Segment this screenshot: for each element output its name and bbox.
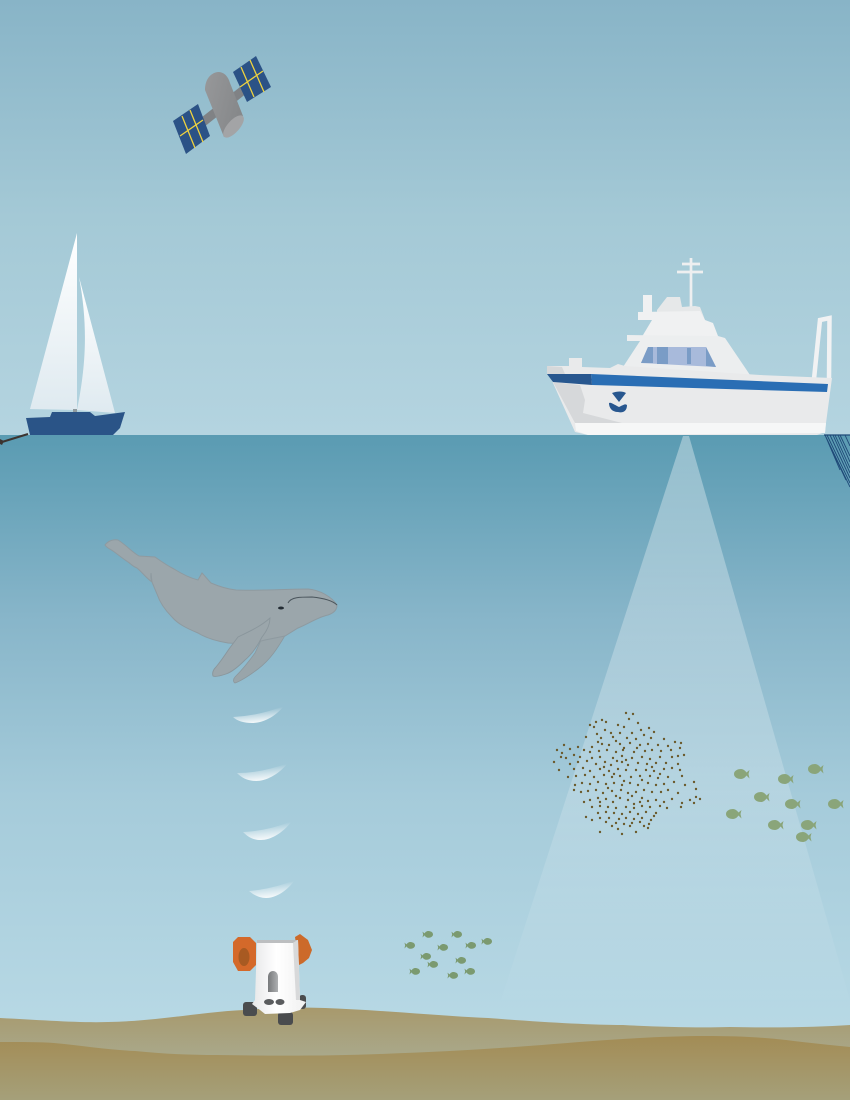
top deck dome xyxy=(657,297,705,320)
sailboat hull xyxy=(26,412,125,435)
small fish school xyxy=(404,931,492,979)
humpback whale xyxy=(105,540,337,683)
sonar beam from ship xyxy=(501,436,850,1000)
mainsail xyxy=(30,233,77,410)
instrument door xyxy=(268,971,278,992)
left float xyxy=(233,937,256,971)
cabin windows xyxy=(641,347,716,367)
sky background xyxy=(0,0,850,435)
pulse 1 xyxy=(233,706,284,723)
mast base xyxy=(73,409,77,413)
solar panel right xyxy=(233,56,271,102)
pulse 2 xyxy=(237,763,288,781)
instrument body xyxy=(252,940,306,1014)
satellite arm xyxy=(198,88,246,126)
hull stripe xyxy=(591,374,828,392)
sailboat xyxy=(0,233,125,445)
pulse 3 xyxy=(243,821,292,840)
keel highlight xyxy=(575,423,826,435)
whale eye xyxy=(278,606,284,610)
net lines at stern xyxy=(825,435,850,487)
satellite body xyxy=(205,72,243,137)
instrument ports xyxy=(264,999,274,1005)
seabed instrument xyxy=(233,934,312,1025)
sound pulses xyxy=(233,706,295,898)
plankton swarm xyxy=(554,713,700,834)
research ship xyxy=(547,258,850,487)
upper level xyxy=(638,311,718,340)
cabin xyxy=(623,335,750,375)
stern frame xyxy=(814,318,830,380)
pulse 4 xyxy=(249,880,295,898)
whale rear flipper xyxy=(234,632,287,683)
NOAA emblem xyxy=(609,392,627,412)
solar panel left xyxy=(173,104,210,154)
whale body xyxy=(105,540,337,644)
sea water xyxy=(0,435,850,1035)
whale mouth line xyxy=(288,597,337,605)
satellite xyxy=(173,56,271,154)
whale front flipper xyxy=(213,618,270,676)
jib sail xyxy=(77,277,115,413)
small radar box xyxy=(643,295,652,312)
large fish school xyxy=(726,764,844,842)
right float xyxy=(295,934,312,965)
mooring line xyxy=(2,434,28,442)
ship hull xyxy=(547,358,832,435)
seabed back layer xyxy=(0,1008,850,1100)
instrument feet xyxy=(243,995,306,1025)
seabed front layer xyxy=(0,1036,850,1100)
bow shading xyxy=(547,366,622,423)
ship mast xyxy=(677,258,703,308)
